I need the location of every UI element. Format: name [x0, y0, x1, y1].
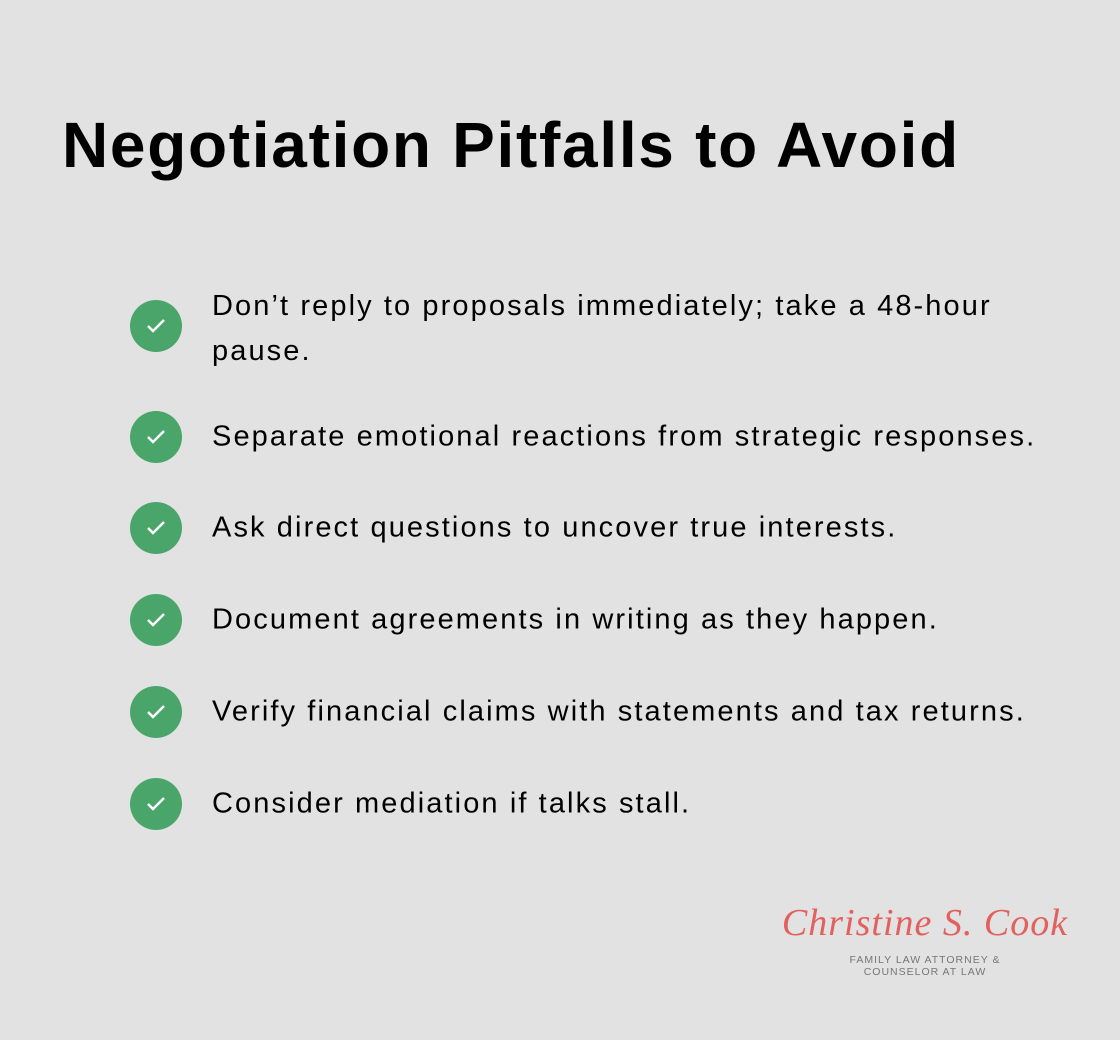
item 4: Document agreements in writing as they happen.	[212, 604, 939, 636]
item 5: Verify financial claims with statements and tax returns.	[212, 696, 1026, 728]
item 1: pause.	[212, 335, 312, 367]
item 2: Separate emotional reactions from strategic responses.	[212, 420, 1036, 452]
item 3: Ask direct questions to uncover true interests.	[212, 512, 897, 544]
logo: FAMILY LAW ATTORNEY &	[850, 954, 1000, 966]
item 3	[130, 502, 897, 554]
logo	[782, 902, 1068, 978]
item 5	[130, 686, 1026, 738]
item 1: Don’t reply to proposals immediately; take a 48-hour	[212, 290, 992, 322]
logo: Christine S. Cook	[782, 902, 1068, 944]
logo: COUNSELOR AT LAW	[864, 966, 986, 978]
item 4	[130, 594, 939, 646]
item 6: Consider mediation if talks stall.	[212, 788, 691, 820]
item 2	[130, 411, 1036, 463]
item 6	[130, 778, 691, 830]
item 1	[130, 290, 992, 367]
title: Negotiation Pitfalls to Avoid	[62, 109, 960, 181]
